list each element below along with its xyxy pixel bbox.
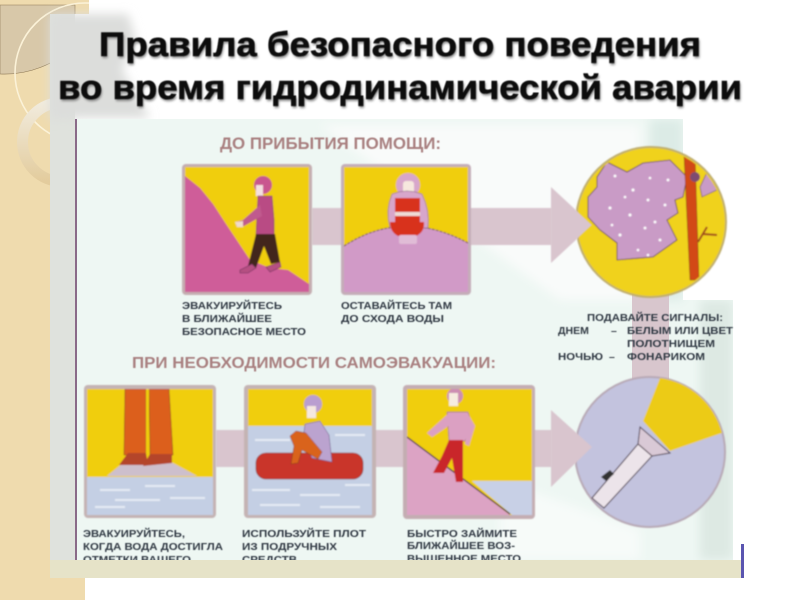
caption: use a raft [242, 527, 367, 566]
icon: flashlight [592, 427, 670, 508]
caption: give signals: БЕЛЫМ ИЛИ ЦВЕТ [627, 325, 734, 337]
icon: person on raft [304, 395, 322, 413]
left decorative beige strip [0, 0, 89, 600]
caption: evacuate [182, 299, 306, 338]
icon: person climbing [447, 388, 463, 404]
caption: evacuate when water reaches: ЭВАКУИРУЙТЕСЬ, [83, 527, 185, 540]
caption: give signals [558, 311, 734, 363]
circle: flashlight at night [575, 377, 725, 527]
connector: between the circles [632, 290, 669, 382]
main illustrated panel background [75, 119, 733, 560]
caption: take the nearest height: ВЫШЕННОЕ МЕСТО [407, 553, 521, 565]
icon: knot [690, 172, 700, 182]
caption: stay: ОСТАВАЙТЕСЬ ТАМ [341, 299, 452, 312]
caption: evacuate when water reaches: КОГДА ВОДА ДОСТИГЛА [83, 541, 223, 553]
panel: use an improvised raft [244, 385, 376, 518]
caption: use a raft: ИЗ ПОДРУЧНЫХ [242, 541, 337, 553]
heading: if self-evacuation is needed: ПРИ НЕОБХОДИМОСТИ САМОЭВАКУАЦИИ: [132, 355, 496, 372]
caption: give signals: – [609, 351, 615, 363]
caption: stay: ДО СХОДА ВОДЫ [341, 313, 444, 325]
caption: use a raft: ИСПОЛЬЗУЙТЕ ПЛОТ [242, 527, 367, 540]
panel: quickly take the nearest height [403, 385, 535, 519]
panel: evacuate to the nearest safe place [182, 164, 312, 295]
caption: evacuate: БЕЗОПАСНОЕ МЕСТО [182, 326, 306, 338]
caption: evacuate: ЭВАКУИРУЙТЕСЬ [182, 299, 282, 312]
caption: evacuate when water reaches [83, 527, 223, 566]
circle: signal with cloth on a pole [576, 147, 726, 297]
icon: white-dotted cloth [588, 160, 687, 260]
arrow: bottom row connector bar [216, 430, 552, 467]
arrow: bottom arrowhead overlapping circle [551, 410, 592, 487]
caption: give signals: НОЧЬЮ [558, 351, 603, 363]
caption: give signals: ФОНАРИКОМ [627, 351, 705, 363]
title: Правила безопасного поведения [99, 26, 701, 64]
title: во время гидродинамической аварии [59, 71, 743, 109]
heading: before help arrives: ДО ПРИБЫТИЯ ПОМОЩИ: [220, 134, 441, 153]
bottom photo strip of the frame [50, 544, 745, 600]
icon: walking person [235, 176, 281, 273]
title [58, 26, 743, 109]
caption: give signals: ПОДАВАЙТЕ СИГНАЛЫ: [587, 311, 723, 324]
caption: evacuate: В БЛИЖАЙШЕЕ [182, 312, 272, 325]
caption: give signals: ДНЕМ [558, 325, 589, 337]
icon: light beam [643, 378, 722, 451]
icon: legs in boots [124, 389, 146, 455]
panel: water reaches your mark [84, 385, 216, 518]
arrow: top arrowhead overlapping circle [551, 187, 592, 263]
caption: use a raft: СРЕДСТВ [242, 554, 297, 566]
panel: stay until the water recedes [341, 164, 471, 295]
title: во время гидродинамической аварии [58, 69, 742, 107]
caption: give signals: ПОЛОТНИЩЕМ [627, 338, 715, 350]
caption: stay [341, 299, 452, 325]
icon: sitting person [388, 173, 428, 244]
icon: pole [684, 155, 699, 280]
caption: evacuate when water reaches: ОТМЕТКИ ВАШЕГО [83, 554, 191, 566]
caption: give signals: – [611, 325, 617, 337]
title: Правила безопасного поведения [100, 28, 702, 66]
caption: take the nearest height: БЫСТРО ЗАЙМИТЕ [407, 527, 517, 540]
icon: raft [256, 453, 363, 479]
arrow: top row connector bar [312, 208, 552, 245]
caption: take the nearest height: БЛИЖАЙШЕЕ ВОЗ- [407, 539, 516, 552]
caption: take the nearest height [407, 527, 521, 565]
